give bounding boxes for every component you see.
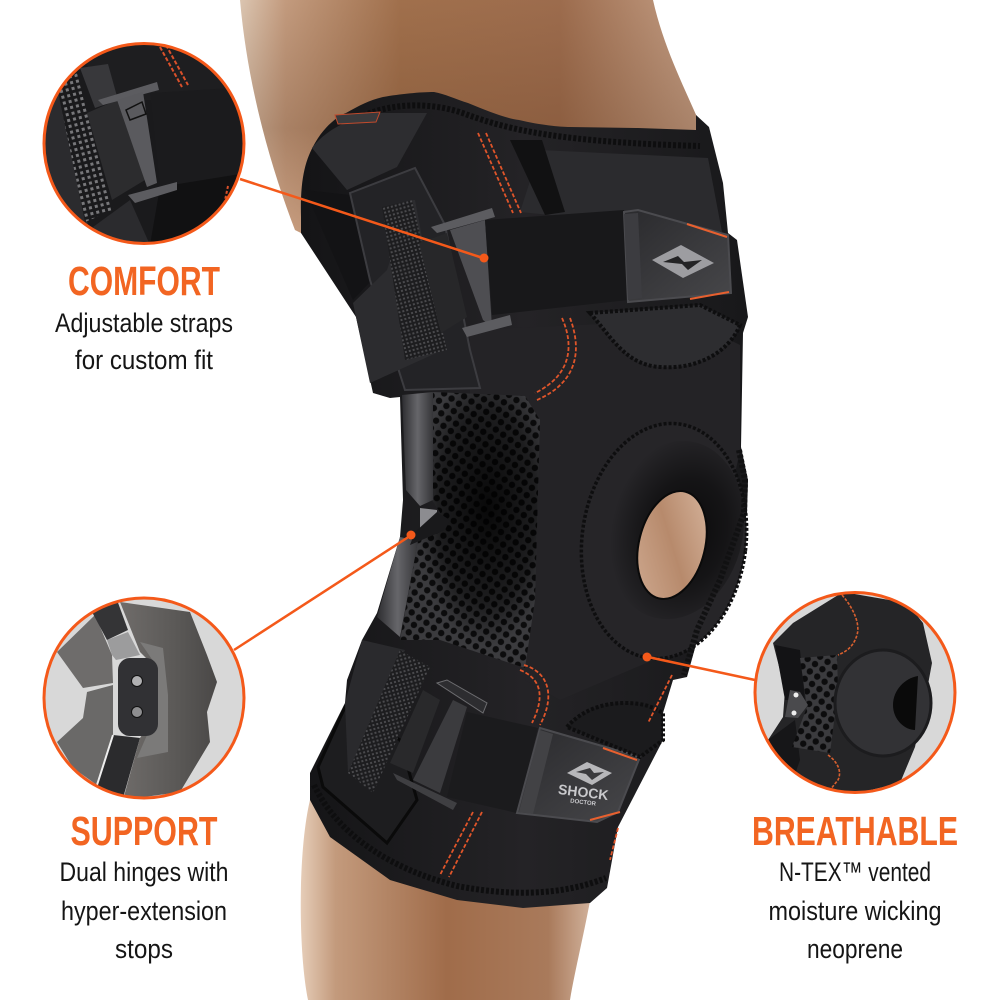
- upper webbing strap: [382, 200, 447, 360]
- callout line: breathable: [642, 652, 755, 680]
- upper horizontal strap: [485, 210, 628, 315]
- text: comfort description: for custom fit: [75, 345, 213, 375]
- lower tab logo: [567, 762, 612, 785]
- text: breathable description: moisture wicking: [768, 896, 942, 926]
- lower rear strap: [390, 690, 440, 773]
- text: support description: Dual hinges with: [60, 857, 228, 887]
- hinge: [377, 392, 450, 637]
- dark stitched strip: [510, 140, 565, 215]
- mesh panel: [400, 392, 540, 668]
- upper folded strap: [353, 200, 443, 383]
- lower horizontal strap: [447, 712, 538, 813]
- lower cup: [567, 703, 663, 757]
- lower left panel: [318, 707, 417, 843]
- upper buckle: [431, 208, 512, 337]
- text: support description: stops: [115, 934, 173, 964]
- circle: support hinge detail: [44, 598, 244, 800]
- thigh: [240, 0, 697, 233]
- upper tab logo: [652, 245, 714, 278]
- top binding: [346, 105, 700, 146]
- orange stitching: [440, 133, 672, 877]
- brace silhouette: [301, 92, 748, 908]
- calf: [301, 800, 592, 1000]
- circle: breathable fabric detail: [755, 592, 955, 795]
- heading: support: SUPPORT: [70, 808, 218, 854]
- callout line: support: [234, 530, 416, 650]
- text: breathable description: neoprene: [807, 934, 903, 964]
- heading: comfort: COMFORT: [68, 258, 220, 304]
- lower side strap: [345, 640, 405, 773]
- text: breathable description: N-TEX™ vented: [779, 857, 931, 887]
- upper rear strap: [419, 233, 467, 333]
- lower tab brand text: SHOCK: [557, 781, 609, 803]
- kneecap pad: [568, 414, 760, 668]
- vertical plate: [350, 168, 480, 390]
- brand tag: [335, 112, 380, 124]
- right neoprene upper panel: [520, 150, 722, 232]
- stitched cup below strap: [590, 305, 740, 367]
- upper strap tab: [624, 210, 731, 302]
- circle: comfort strap detail: [40, 43, 246, 245]
- left inner panel: [305, 190, 372, 300]
- callout line: comfort: [240, 179, 488, 262]
- thigh side panel: [312, 113, 427, 190]
- lower bottom binding: [314, 785, 606, 893]
- central neoprene below strap: [470, 320, 740, 700]
- lower tab brand text: DOCTOR: [570, 799, 597, 808]
- right edge mesh binding: [684, 450, 745, 675]
- photo: leg wearing knee brace: [240, 0, 760, 1000]
- lower buckle: [393, 680, 487, 810]
- lower webbing strap: [348, 650, 430, 793]
- lower strap tab: [517, 728, 640, 822]
- kneecap hole: [627, 484, 717, 606]
- text: comfort description: Adjustable straps: [55, 308, 233, 338]
- text: support description: hyper-extension: [61, 896, 227, 926]
